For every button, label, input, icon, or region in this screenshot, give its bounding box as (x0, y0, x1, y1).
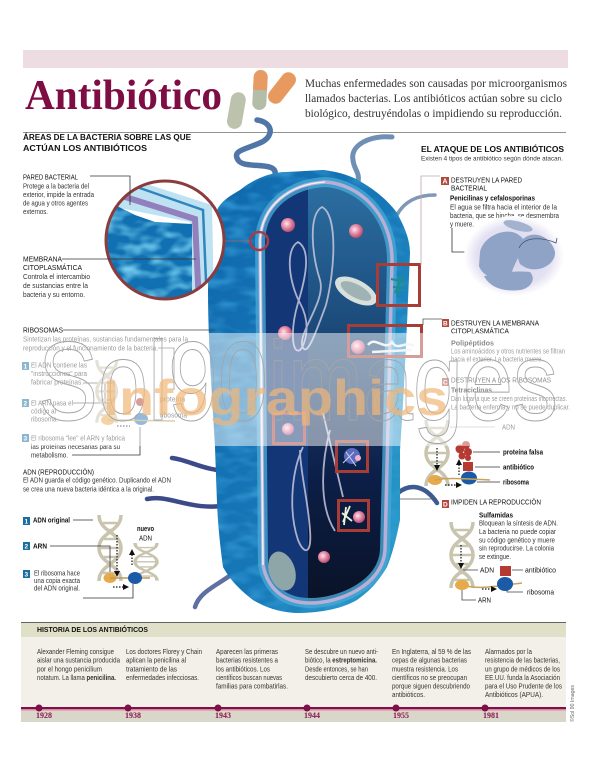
text: La bacteria no puede copiar (479, 527, 557, 536)
entry 1955: científicos no se preocupan (392, 673, 467, 682)
entry 1943: bacterias resistentes a (216, 656, 278, 664)
ribosome blue (134, 413, 148, 425)
antibiotic square (463, 462, 473, 471)
ribosome diagram (97, 360, 187, 426)
entry 1955 (392, 647, 471, 720)
ribosome orange (455, 580, 469, 590)
step 2: ARN (33, 542, 47, 550)
small circle (250, 232, 268, 250)
icon C (442, 378, 449, 386)
labels (502, 422, 544, 486)
text (451, 318, 565, 364)
labels: ADN (502, 422, 515, 432)
text: El agua se filtra hacia el interior de la (450, 202, 557, 212)
ribosome blue (128, 572, 142, 584)
arrows (434, 448, 462, 488)
text: sin reproducirse. La colonia (479, 544, 554, 552)
text: Sulfamidas (479, 510, 513, 520)
entry 1981: Antibióticos (APUA). (485, 690, 543, 699)
cytoplasm left half (260, 182, 392, 603)
text: DNA reproduction: se crea una nueva bacteria idéntica a la original. (23, 484, 154, 494)
entry 1928: Alexander Fleming consigue (37, 647, 114, 656)
text: ribosomes: reproducción y el funcionamiento de la bacteria. (23, 344, 158, 352)
text (450, 176, 559, 228)
text: BACTERIAL (451, 184, 487, 192)
step 2 (23, 542, 47, 550)
text: cytoplasmic membrane: MEMBRANA (23, 254, 62, 264)
entry 1955: cepas de algunas bacterias (392, 656, 467, 664)
attack B (442, 318, 565, 364)
entry 1943: los antibióticos. Los (216, 664, 270, 674)
labels: proteína falsa (503, 448, 544, 456)
ribosome orange (101, 415, 115, 425)
introduction text: Muchas enfermedades son causadas por microorganismos (305, 78, 568, 90)
text: cell wall: PARED BACTERIAL (23, 172, 78, 182)
ribosome blue (497, 577, 513, 591)
labels: ribosoma (503, 478, 530, 486)
text: cytoplasmic membrane (23, 254, 90, 299)
entry 1981: EE.UU. funda la Asociación (485, 673, 560, 682)
text: y muere. (450, 220, 474, 228)
text: ribosomes: Sintetizan las proteínas, sustancias fundamentales para la (23, 334, 188, 344)
list: step 3: las proteínas necesarias para su (31, 442, 120, 451)
entry 1944: descubierto cerca de 400. (305, 673, 377, 682)
text (451, 498, 558, 561)
entry 1981 (482, 647, 562, 720)
text: ribosomes (23, 326, 188, 352)
text: IMPIDEN LA REPRODUCCIÓN (451, 498, 541, 506)
labels: antibiótico (525, 566, 556, 574)
wall section (118, 184, 214, 291)
entry 1943: Aparecen las primeras (216, 647, 278, 656)
step 2: 2 (24, 544, 28, 550)
magnifier (105, 178, 224, 305)
step 3: una copia exacta (34, 576, 80, 585)
entry 1981: un grupo de médicos de los (485, 664, 560, 674)
list: step 2 (22, 398, 73, 424)
list: step 3: El ribosoma "lee" el ARN y fabrica (31, 434, 125, 442)
panel header (21, 622, 566, 637)
text: cytoplasmic membrane: CITOPLASMÁTICA (23, 263, 82, 272)
dotted arrows (458, 545, 497, 592)
icon A: A (442, 178, 448, 186)
entry 1981: Alarmados por la (485, 647, 532, 656)
entry 1944: Desde entonces, se han (305, 664, 368, 674)
entry 1928: por el hongo penicilium (37, 664, 102, 674)
leader lines (50, 520, 133, 598)
entry 1943: familias para combatirlas. (216, 682, 288, 690)
attack D (442, 498, 558, 604)
list: step 3 (22, 434, 125, 460)
panel background (21, 622, 566, 722)
DNA helix (426, 420, 448, 486)
text: bacteria, que se hincha, se desmembra (450, 211, 559, 220)
leader lines (462, 570, 523, 600)
outer layer (138, 188, 208, 282)
step 1: 1 (24, 518, 28, 526)
list: step 1: fabricar proteínas. (31, 378, 83, 386)
entry 1955: En Inglaterra, al 59 % de las (392, 647, 471, 656)
antibiotic square (500, 566, 511, 576)
strand (435, 478, 490, 480)
ribosome blue (461, 472, 477, 484)
entry 1938 (124, 647, 202, 720)
text: cell wall: de agua y otros agentes (23, 198, 88, 208)
entry 1955: muestra resistencia. Los (392, 664, 458, 674)
labels: ARN (478, 596, 491, 604)
text: cell wall: externos. (23, 207, 48, 216)
entry 1938: 1938 (125, 711, 141, 720)
list: step 3: metabolismo. (31, 450, 68, 460)
text: Polipéptidos (451, 338, 494, 348)
text: DESTRUYEN A LOS RIBOSOMAS (451, 376, 551, 384)
list: step 1 (22, 360, 87, 386)
text (451, 376, 570, 412)
text: ribosomes: RIBOSOMAS (23, 326, 63, 334)
ribosome balls (278, 218, 365, 563)
molecule in box C (343, 448, 361, 466)
membrane layers (124, 195, 201, 289)
icon: antibiotic capsules (226, 69, 299, 130)
step 3: del ADN original. (34, 584, 80, 592)
labels: ADN (480, 566, 494, 574)
new DNA label: nuevo (137, 524, 154, 533)
text: cytoplasmic membrane: bacteria y su entorno. (23, 290, 85, 299)
text: Los aminoácidos y otros nutrientes se filtran (451, 346, 565, 356)
panel: history timeline (21, 622, 566, 722)
entry 1938: Los doctores Florey y Chain (126, 647, 202, 656)
icon D: D (443, 502, 448, 508)
arrows (113, 535, 135, 590)
text: Bloquean la síntesis de ADN. (479, 518, 558, 528)
introduction text: biológico, destruyéndolas o impidiendo su reproducción. (305, 108, 562, 120)
step 3: El ribosoma hace (34, 568, 80, 578)
illustration: bacterium (208, 170, 410, 613)
diagram (451, 522, 556, 604)
DNA helix (451, 522, 473, 588)
entry 1928: notatum. La llama penicilina. (37, 673, 116, 682)
entry 1938: tratamiento de las (126, 664, 177, 674)
text: su código genético y muere (479, 536, 555, 544)
text: cell wall (23, 172, 94, 216)
heading: the attack (421, 143, 564, 162)
heading: areas: ACTÚAN LOS ANTIBIÓTICOS (23, 142, 147, 153)
text: cytoplasmic membrane: de sustancias entre la (23, 281, 88, 290)
text: DNA reproduction: El ADN guarda el código genético. Duplicando el ADN (23, 476, 171, 484)
text: se extingue. (479, 552, 511, 561)
list: step 2: ribosoma. (31, 414, 58, 424)
heading: the attack: Existen 4 tipos de antibiótico según dónde atacan. (421, 156, 563, 162)
strand (108, 420, 175, 421)
red markers on the bacterium (274, 264, 422, 530)
dotted arrow (117, 425, 130, 427)
watermark orange text: Infographics (103, 370, 448, 426)
step 3 (23, 568, 80, 592)
step 3: 3 (24, 572, 28, 578)
textured cut face (108, 206, 192, 298)
entry 1955: 1955 (393, 711, 409, 720)
cell membrane (260, 182, 392, 603)
mitochondrion upper (331, 270, 381, 312)
cytoplasm right half (308, 184, 390, 601)
introduction text: llamados bacterias. Los antibióticos actúan sobre su ciclo (305, 93, 562, 105)
title: Antibiótico (25, 73, 222, 119)
text: DESTRUYEN LA PARED (451, 176, 522, 184)
entry 1928 (36, 647, 120, 720)
diagram (426, 420, 544, 488)
header rule (23, 132, 566, 133)
false protein (456, 441, 472, 461)
flagella (147, 120, 437, 607)
labels (478, 566, 556, 604)
introduction text (305, 78, 568, 120)
icon: DNA helix (97, 360, 117, 423)
red protein blobs (136, 398, 144, 406)
chromosome loops (290, 207, 343, 550)
heading: the attack: EL ATAQUE DE LOS ANTIBIÓTICOS (421, 143, 564, 154)
text: Tetraciclinas (451, 386, 492, 394)
ribosome orange (428, 475, 442, 485)
text: cell wall: Protege a la bacteria del (23, 182, 89, 190)
entry 1981: 1981 (483, 711, 499, 720)
text: DNA reproduction: ADN (REPRODUCCIÓN) (23, 468, 94, 476)
header band (23, 50, 568, 68)
ribosome label: ribosoma (160, 410, 187, 420)
list: step 2: El ARN pasa el (31, 398, 73, 408)
list: step 2: 2 (24, 400, 28, 408)
entry 1981: para el Uso Prudente de los (485, 682, 562, 690)
molecule in box A (391, 276, 406, 295)
heading: areas (23, 132, 191, 153)
credit: ©Sol 90 Images (569, 684, 576, 722)
labels: ribosoma (527, 588, 554, 596)
original DNA (99, 515, 121, 581)
entry 1955: antibióticos. (392, 690, 425, 699)
new DNA (135, 543, 157, 581)
attack A (441, 176, 564, 296)
illustration: ruptured bacterium (464, 216, 564, 296)
list: step 3: 3 (24, 436, 28, 442)
text: DNA reproduction (23, 468, 171, 494)
heading: areas: ÁREAS DE LA BACTERIA SOBRE LAS QUE (23, 132, 191, 142)
text: hacia el exterior. La bacteria muere. (451, 354, 543, 364)
new DNA label: ADN (139, 534, 152, 542)
text: La bacteria enferma y no se puede duplicar. (451, 402, 570, 412)
entry 1928: aislar una sustancia producida (37, 656, 120, 664)
molecule in box D (342, 506, 352, 525)
DNA reproduction diagram (23, 515, 157, 598)
entry 1944 (304, 647, 378, 720)
protein label: proteína (160, 394, 185, 404)
icon C: C (443, 380, 448, 386)
list: step 2: código al (31, 406, 56, 416)
entry 1938: aplican la penicilina al (126, 656, 186, 664)
watermark band (0, 333, 595, 446)
strand (462, 583, 522, 587)
text: CITOPLASMÁTICA (451, 326, 509, 336)
outer wall of the bacterium (208, 170, 410, 613)
text: cytoplasmic membrane: Controla el intercambio (23, 272, 90, 281)
molecule in box B (368, 342, 414, 352)
entry 1938: enfermedades infecciosas. (126, 673, 199, 682)
text: DESTRUYEN LA MEMBRANA (451, 318, 539, 328)
panel header: HISTORIA DE LOS ANTIBIÓTICOS (37, 625, 148, 634)
entry 1981: resistencia de las bacterias, (485, 656, 560, 664)
text: Penicilinas y cefalosporinas (450, 194, 535, 202)
entry 1955: porque siguen descubriendo (392, 682, 470, 690)
leader lines (450, 426, 495, 428)
list: step 1: "instrucciones" para (31, 369, 87, 378)
entry 1943: científicos buscan nuevas (216, 673, 282, 682)
entry 1944: Se descubre un nuevo anti- (305, 647, 378, 656)
icon B: B (443, 320, 448, 328)
strand (110, 577, 150, 579)
entry 1928: 1928 (36, 711, 52, 720)
entry 1944: biótico, la estreptomicina. (305, 656, 377, 664)
inner wall (260, 182, 392, 603)
attack C (426, 376, 570, 488)
list: step 1: 1 (24, 364, 28, 370)
timeline base (21, 707, 566, 722)
labels: antibiótico (503, 462, 535, 472)
entry 1943 (214, 647, 288, 720)
leader lines (62, 176, 500, 499)
step 1: ADN original (33, 516, 70, 524)
ribosome orange (104, 573, 116, 583)
step 1 (23, 516, 70, 526)
list: step 1: El ADN contiene las (31, 360, 87, 370)
white membrane line (260, 182, 325, 565)
mitochondrion lower (263, 548, 301, 594)
new DNA label (137, 524, 154, 542)
entry 1944: 1944 (304, 711, 320, 720)
entry 1943: 1943 (215, 711, 231, 720)
text: cell wall: exterior, impide la entrada (23, 190, 94, 199)
